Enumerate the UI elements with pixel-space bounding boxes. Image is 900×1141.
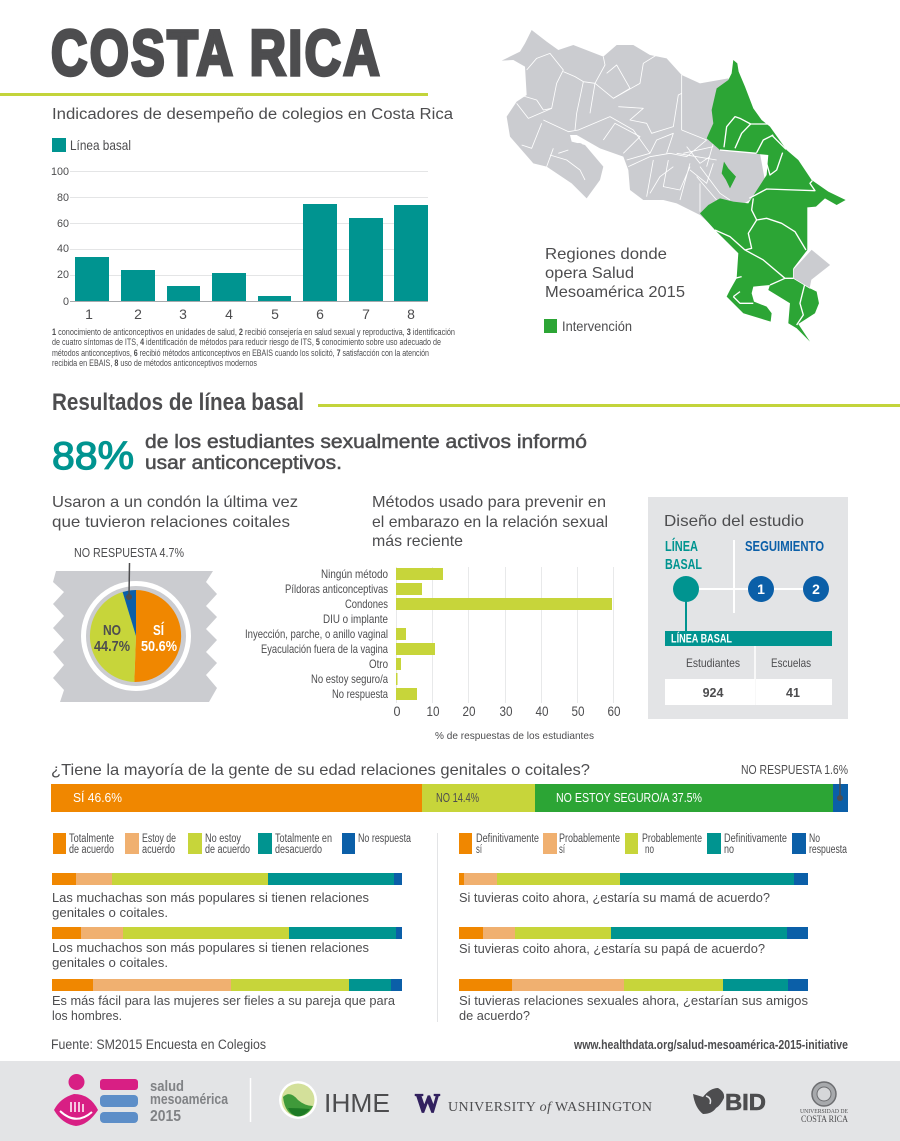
logo: Universidad de Costa Rica: UNIVERSIDAD DE [800,1108,848,1115]
heading: methods: Métodos usado para prevenir en [372,494,606,511]
heading: condom: Usaron a un condón la última vez [52,494,298,511]
map caption [545,246,685,301]
legend: likelihood: Definitivamente [476,833,539,845]
map legend: Intervención [562,318,632,334]
legend: agreement: No respuesta [358,833,411,845]
stacked bar: peers [51,763,848,812]
item: fidelity: Es más fácil para las mujeres ser fieles a su pareja que para [52,993,396,1008]
logo: Universidad de Costa Rica [800,1082,848,1125]
bar chart: school indicators: 6 [316,306,324,322]
panel: study design: 2 [812,581,820,597]
heading: condom: que tuvieron relaciones coitales [52,514,290,531]
stacked bar: peers: NO RESPUESTA 1.6% [741,763,848,777]
bar chart: contraceptive methods: % de respuestas de los estudiantes [435,730,594,742]
bar chart: contraceptive methods: 30 [500,704,512,719]
legend: agreement: desacuerdo [275,844,322,856]
bar chart: school indicators: 0 [63,296,69,308]
panel: study design: LÍNEA BASAL [671,632,732,646]
footnote: indicator definitions: 1 conocimiento de anticonceptivos en unidades de salud, 2 recibió consejería en salud sexual y reproductiva, 3 identificación [52,327,455,337]
legend: agreement: Totalmente en [275,833,332,845]
heading: methods: más reciente [372,533,463,550]
panel: study design: Estudiantes [686,656,740,670]
bar chart: contraceptive methods: Píldoras anticonceptivas [285,582,388,596]
item: mamá [459,873,808,905]
title: COSTA RICA [51,17,382,89]
legend: likelihood: respuesta [809,844,847,856]
item: papá [459,927,808,956]
legend: likelihood: Definitivamente [724,833,787,845]
pie chart: condom use: 44.7% [94,638,130,655]
logo: salud mesoamérica: salud [150,1079,184,1095]
item: fidelity: los hombres. [52,1008,122,1023]
item: amigos: Si tuvieras relaciones sexuales ahora, ¿estarían sus amigos [459,993,808,1008]
item: muchachos: genitales o coitales. [52,955,168,970]
bar chart: school indicators: 80 [57,192,69,204]
bar chart: contraceptive methods: 60 [608,704,620,719]
bar chart: contraceptive methods: Inyección, parche, o anillo vaginal [245,627,388,641]
logo: University of Washington: W [415,1089,440,1118]
item: papá: Si tuvieras coito ahora, ¿estaría su papá de acuerdo? [459,941,765,956]
logo: salud mesoamérica [54,1074,229,1126]
key statistic: usar anticonceptivos. [145,453,342,474]
heading: condom [52,494,298,531]
legend: agreement: Totalmente [69,833,114,845]
legend: likelihood: Probablemente [642,833,702,845]
panel: study design: SEGUIMIENTO [745,538,824,555]
bar chart: school indicators: 2 [134,306,142,322]
item: mamá: Si tuvieras coito ahora, ¿estaría su mamá de acuerdo? [459,890,770,905]
legend: agreement: No estoy [205,833,241,845]
logo: University of Washington [415,1089,652,1118]
legend: likelihood: No [809,833,820,845]
map caption: Regiones donde [545,246,667,263]
bar chart: school indicators: 3 [179,306,187,322]
logo: BID: BID [725,1089,766,1115]
bar chart: school indicators: 20 [57,269,69,281]
footnote: indicator definitions [52,327,455,368]
bar chart: contraceptive methods: No respuesta [332,687,388,701]
item: amigos [459,979,808,1023]
bar chart: contraceptive methods: Otro [369,657,388,671]
legend: agreement: de acuerdo [205,844,250,856]
panel: study design: Escuelas [771,656,811,670]
stacked bar: peers: NO ESTOY SEGURO/A 37.5% [556,791,702,805]
logo: salud mesoamérica: mesoamérica [150,1092,229,1108]
section heading: Resultados de línea basal [52,389,304,416]
bar chart: contraceptive methods: 40 [536,704,548,719]
item: muchachos [52,927,402,970]
bar chart: school indicators: 4 [225,306,233,322]
bar chart: contraceptive methods [245,567,620,742]
panel: study design: 1 [757,581,765,597]
panel: study design: 41 [786,686,800,700]
legend: agreement: acuerdo [142,844,175,856]
legend: likelihood: no [645,844,654,856]
bar chart: contraceptive methods: No estoy seguro/a [311,672,388,686]
bar chart: school indicators: 60 [57,218,69,230]
stacked bar: peers: SÍ 46.6% [73,790,122,805]
logo: Universidad de Costa Rica: COSTA RICA [801,1115,848,1125]
legend: likelihood: no [724,844,734,856]
logo: salud mesoamérica: 2015 [150,1108,181,1125]
item: muchachas: Las muchachas son más populares si tienen relaciones [52,890,369,905]
footnote: indicator definitions: métodos anticonceptivos, 6 recibió métodos anticonceptivos en EBAIS cuando los solicitó, 7 satisfacción con la atención [52,348,429,358]
stacked bar: peers: NO 14.4% [436,791,479,805]
footer [0,1061,900,1141]
bar chart: school indicators: 40 [57,243,69,255]
heading: methods [372,494,608,550]
map caption: opera Salud [545,265,634,282]
pie chart: condom use: NO [103,622,121,639]
item: muchachas [52,873,402,920]
pie chart: condom use: SÍ [153,622,165,639]
bar chart: school indicators [51,166,428,322]
bar chart: contraceptive methods: 0 [394,704,400,719]
legend: likelihood: sí [476,844,483,856]
bar chart: school indicators: 100 [51,166,69,178]
map: Costa Rica regions [502,30,846,342]
bar chart: contraceptive methods: 20 [462,704,476,719]
bar chart: school indicators: 5 [271,306,279,322]
bar chart: school indicators: 8 [407,306,415,322]
bar chart: contraceptive methods: Condones [345,597,388,611]
url: www.healthdata.org/salud-mesoamérica-2015-initiative [573,1038,848,1052]
bar chart: contraceptive methods: Ningún método [321,567,388,581]
heading: peers: ¿Tiene la mayoría de la gente de su edad relaciones genitales o coitales? [51,762,590,779]
legend: likelihood: Probablemente [559,833,620,845]
key statistic [52,432,587,478]
pie chart: condom use: 50.6% [141,638,177,655]
legend: línea basal [52,137,131,153]
panel: study design: Diseño del estudio [664,513,804,530]
legend: agreement: Estoy de [142,833,176,845]
key statistic: 88% [52,435,134,478]
panel: study design: 924 [703,686,723,700]
legend: línea basal: Línea basal [70,137,131,153]
item: muchachas: genitales o coitales. [52,905,168,920]
pie chart: condom use [53,546,217,702]
bar chart: contraceptive methods: 10 [426,704,440,719]
logo: IHME [279,1081,390,1119]
heading: school indicators: Indicadores de desempeño de colegios en Costa Rica [52,106,453,123]
legend: likelihood [459,833,847,856]
item: amigos: de acuerdo? [459,1008,530,1023]
item: muchachos: Los muchachos son más populares si tienen relaciones [52,940,369,955]
footnote: indicator definitions: de cuatro síntomas de ITS, 4 identificación de métodos para reducir riesgo de ITS, 5 conocimiento sobre uso adecuado de [52,337,441,347]
logo: BID [693,1088,766,1115]
legend: likelihood: sí [559,844,566,856]
section heading [52,389,900,416]
legend: agreement: de acuerdo [69,844,114,856]
bar chart: contraceptive methods: 50 [572,704,584,719]
bar chart: contraceptive methods: Eyaculación fuera de la vagina [261,642,388,656]
item: fidelity [52,979,402,1023]
panel: study design [648,497,848,719]
bar chart: school indicators: 1 [85,306,93,322]
logo: IHME: IHME [324,1088,390,1118]
source: Fuente: SM2015 Encuesta en Colegios [51,1037,266,1052]
map caption: Mesoamérica 2015 [545,284,685,301]
footnote: indicator definitions: recibida en EBAIS, 8 uso de métodos anticonceptivos modernos [52,358,257,368]
legend: agreement [53,833,411,856]
bar chart: school indicators: 7 [362,306,370,322]
panel: study design: BASAL [665,556,702,573]
heading: methods: el embarazo en la relación sexual [372,514,608,531]
panel: study design: LÍNEA [665,538,698,555]
pie chart: condom use: NO RESPUESTA 4.7% [74,546,184,560]
logo: University of Washington: UNIVERSITY of WASHINGTON [448,1100,652,1115]
key statistic: de los estudiantes sexualmente activos informó [145,432,587,453]
bar chart: contraceptive methods: DIU o implante [323,612,388,626]
